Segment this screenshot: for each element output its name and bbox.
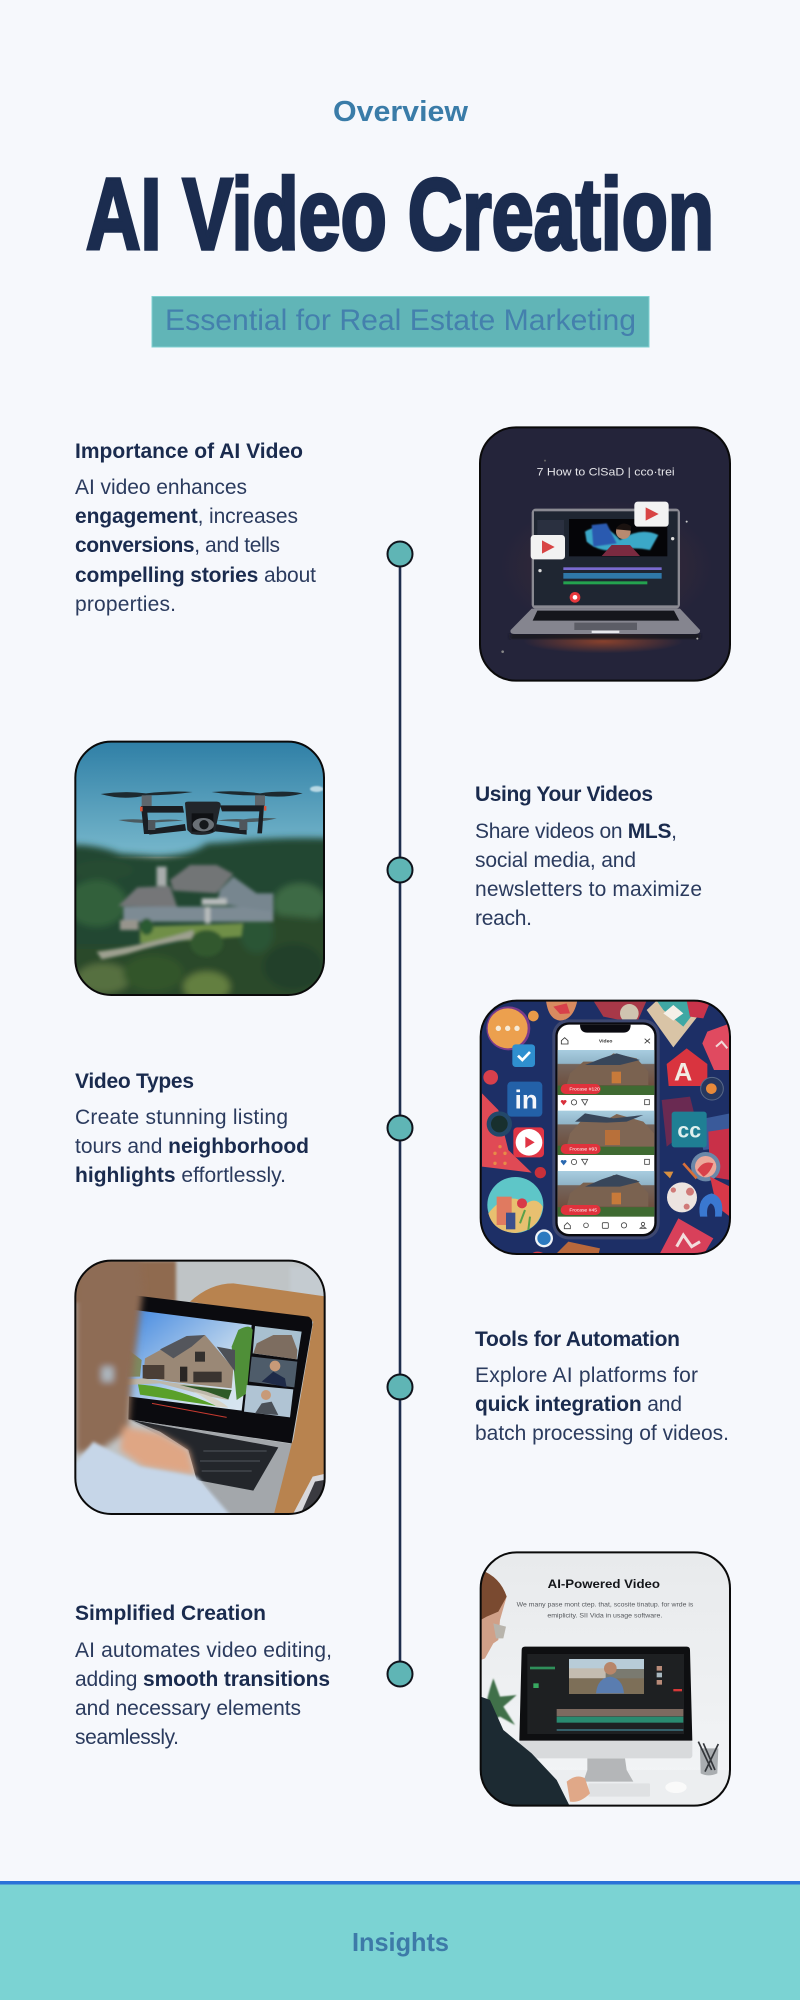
timeline node 5 (388, 1662, 412, 1686)
text block: Video Types: Video Types (75, 1070, 194, 1093)
feed post 1 (558, 1050, 654, 1095)
timeline node 2 (388, 858, 412, 882)
text block: Using Your Videos: Using Your Videos (475, 783, 653, 806)
decorative collage: left (486, 1006, 530, 1050)
decorative collage: right (702, 1023, 730, 1070)
timeline (388, 542, 412, 1686)
timeline node 1 (388, 542, 412, 566)
text block: Tools for Automation (475, 1328, 729, 1445)
text block: Importance of AI Video: engagement, increases (75, 505, 298, 528)
feed post 2 (558, 1111, 654, 1155)
text block: Video Types: tours and neighborhood (75, 1135, 309, 1158)
text block: Simplified Creation (75, 1602, 332, 1749)
feed post 1: Frocase #120 (569, 1086, 600, 1092)
text block: Video Types (75, 1070, 309, 1187)
image: phone with social media feed: cc (677, 1118, 701, 1142)
text block: Simplified Creation: seamlessly. (75, 1726, 179, 1749)
footer band (0, 1881, 800, 2000)
timeline node 4 (388, 1374, 412, 1400)
text block: Importance of AI Video (75, 440, 316, 616)
text block: Importance of AI Video: Importance of AI Video (75, 440, 303, 463)
image: phone with social media feed (481, 1001, 730, 1255)
phone (552, 1019, 660, 1239)
text block: Using Your Videos: reach. (475, 907, 532, 930)
text block: Tools for Automation: Explore AI platforms for (475, 1364, 698, 1387)
phone: Video (599, 1039, 612, 1045)
text block: Video Types: highlights effortlessly. (75, 1164, 286, 1187)
subtitle banner (152, 296, 649, 347)
footer label: Insights: Insights (352, 1927, 449, 1957)
image: phone with social media feed: in (515, 1084, 538, 1114)
feed post 2: Frocase #93 (569, 1146, 597, 1152)
image: AI-powered video on desktop monitor: We many pase mont ctep. that, scosite tinatup. for wrde is (517, 1602, 693, 1609)
text block: Using Your Videos: social media, and (475, 849, 636, 872)
image: phone with social media feed: A (674, 1059, 692, 1087)
decorative collage: top (646, 1002, 697, 1048)
text block: Simplified Creation: Simplified Creation (75, 1602, 266, 1625)
text block: Using Your Videos: Share videos on MLS, (475, 820, 677, 843)
image: laptop video editor on dark background (480, 427, 730, 681)
text block: Video Types: Create stunning listing (75, 1106, 288, 1129)
text block: Tools for Automation: batch processing of videos. (475, 1422, 729, 1445)
image: AI-powered video on desktop monitor: AI-Powered Video (548, 1577, 660, 1591)
subtitle banner: Essential for Real Estate Marketing (165, 304, 636, 337)
text block: Simplified Creation: and necessary elements (75, 1697, 301, 1720)
timeline node 3 (388, 1116, 412, 1140)
image: person viewing house video on laptop (75, 1261, 327, 1517)
image: AI-powered video on desktop monitor (481, 1552, 730, 1807)
image: laptop video editor on dark background: 7 How to ClSaD | cco·trei (537, 466, 675, 478)
image: AI-powered video on desktop monitor: emiplicity. SII Vida in usage software. (547, 1612, 663, 1619)
text block: Importance of AI Video: properties. (75, 593, 176, 616)
text block: Tools for Automation: Tools for Automation (475, 1328, 680, 1351)
text block: Using Your Videos: newsletters to maximize (475, 878, 702, 901)
text block: Tools for Automation: quick integration and (475, 1393, 682, 1416)
eyebrow: Overview: Overview (333, 96, 468, 128)
text block: Simplified Creation: adding smooth transitions (75, 1668, 330, 1691)
text block: Using Your Videos (475, 783, 702, 930)
text block: Importance of AI Video: compelling stories about (75, 564, 316, 587)
image: drone over house (67, 742, 333, 1003)
feed post 3 (558, 1171, 654, 1217)
text block: Simplified Creation: AI automates video editing, (75, 1639, 332, 1662)
feed post 3: Frocase #45 (569, 1207, 597, 1213)
text block: Importance of AI Video: AI video enhances (75, 476, 247, 499)
text block: Importance of AI Video: conversions, and tells (75, 534, 280, 557)
